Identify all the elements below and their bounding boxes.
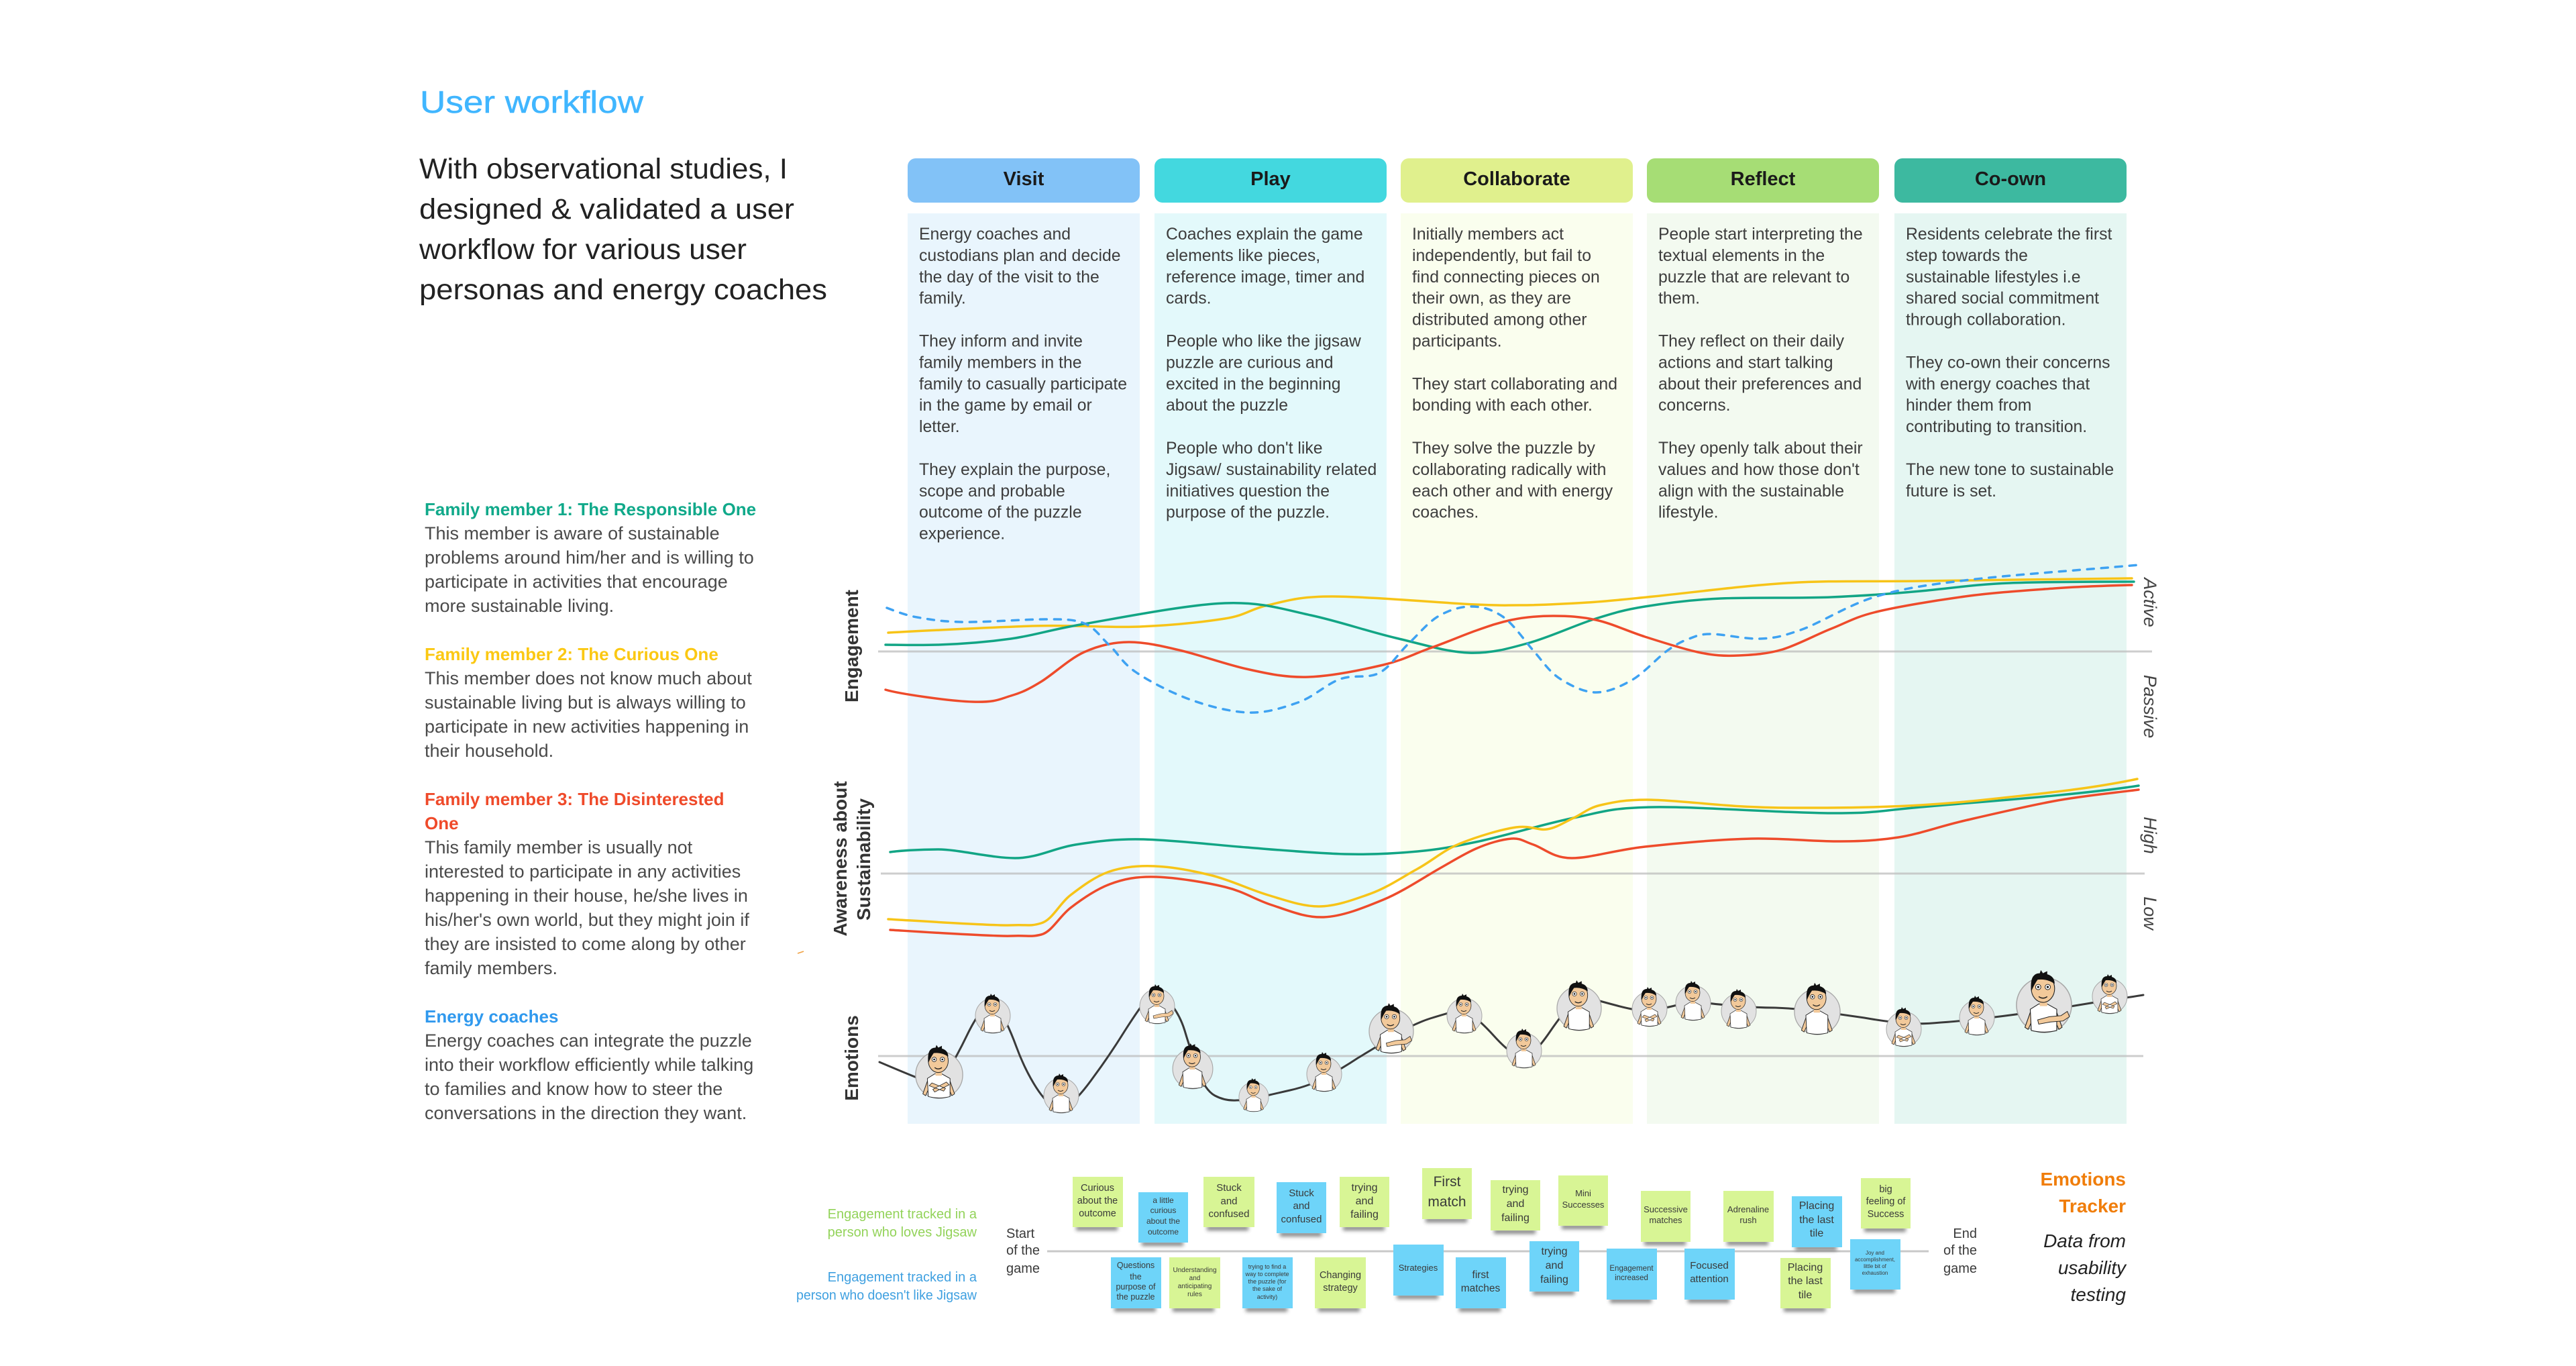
sticky: trying to find a way: activity): [1257, 1294, 1277, 1300]
emotion curve: [879, 993, 2143, 1108]
sticky: trying and failing blue: failing: [1540, 1274, 1568, 1285]
sticky: trying and failing upper: failing: [1501, 1212, 1529, 1224]
sticky: first matches: matches: [1461, 1283, 1501, 1294]
sticky: Changing strategy: strategy: [1323, 1283, 1358, 1294]
stage description: Co-own: The new tone to sustainable: [1906, 461, 2114, 479]
sticky: Joy and accomplishment: little bit of: [1864, 1263, 1887, 1269]
sticky: Questions the purpose of the puzzle: purpose of: [1116, 1282, 1156, 1292]
avatar: hopeful: [1447, 994, 1482, 1033]
sticky: Engagement increased: Engagement: [1609, 1265, 1654, 1273]
subtitle text block: With observational studies, I: [419, 153, 788, 185]
sticky: big feeling of Success: feeling of: [1866, 1196, 1906, 1207]
stage description: Co-own: with energy coaches that: [1905, 375, 2090, 393]
stage header: Collaborate: Collaborate: [1463, 168, 1570, 190]
sticky: trying and failing: [1340, 1177, 1389, 1230]
sticky: Stuck and confused blue: confused: [1281, 1214, 1322, 1225]
legend: doesn't like Jigsaw: [796, 1270, 977, 1303]
column: Reflect: [1647, 158, 1879, 1124]
sticky: Focused attention: [1684, 1249, 1735, 1303]
stage description: Collaborate: collaborating radically with: [1412, 461, 1606, 479]
stage description: Visit: They inform and invite: [919, 333, 1083, 350]
stage description: Play: People who like the jigsaw: [1166, 333, 1361, 350]
sticky: Adrenaline rush: rush: [1739, 1215, 1757, 1225]
emotions chart: [879, 970, 2143, 1113]
heading: Emotions Tracker: Emotions: [2040, 1169, 2126, 1190]
stage description: Visit: letter.: [919, 418, 960, 436]
avatar: laughing: [1557, 980, 1601, 1031]
sticky: trying and failing: trying: [1351, 1182, 1378, 1194]
sticky: Placing the last tile blue: tile: [1810, 1228, 1823, 1239]
sticky: Stuck and confused green: confused: [1209, 1208, 1249, 1220]
column background: Collaborate: [1401, 213, 1633, 1124]
stage description: Play: purpose of the puzzle.: [1166, 504, 1330, 522]
note: data from usability testing: usability: [2058, 1257, 2127, 1278]
persona: family member 2: Family member 2: The Curious One: [425, 644, 718, 664]
persona: family member 3: happening in their house, he/she lives in: [425, 886, 748, 906]
sticky: Stuck and confused blue: and: [1293, 1200, 1310, 1212]
avatar: yawning: [1173, 1043, 1213, 1089]
persona: family member 3: interested to participate in any activities: [425, 861, 741, 882]
awareness line chart: [888, 779, 2139, 936]
subtitle text block: personas and energy coaches: [419, 274, 827, 306]
stage header: Reflect: [1647, 158, 1879, 203]
heading: Emotions Tracker: [2040, 1169, 2126, 1216]
label: end of the game: End: [1953, 1226, 1977, 1241]
sticky: trying and failing: and: [1356, 1196, 1373, 1207]
sticky: Joy and accomplishment: [1850, 1239, 1900, 1293]
sticky: First match: First: [1434, 1174, 1461, 1190]
sticky: Curious about the outcome: outcome: [1079, 1208, 1116, 1219]
avatar: thinking: [1507, 1029, 1542, 1068]
sticky: Joy and accomplishment: Joy and: [1866, 1250, 1884, 1256]
persona: family member 3: they are insisted to come along by other: [425, 934, 746, 954]
sticky: Placing the last tile blue: [1792, 1196, 1842, 1251]
stage description: Collaborate: distributed among other: [1412, 311, 1587, 329]
column background: Reflect: [1647, 213, 1879, 1124]
sticky: Understanding and anticipating rules: rules: [1187, 1291, 1202, 1298]
sticky: Questions the purpose of the puzzle: [1111, 1257, 1161, 1312]
stage description: Play: puzzle are curious and: [1166, 354, 1334, 372]
stage description: Reflect: They openly talk about their: [1658, 439, 1863, 458]
persona list panel: [425, 499, 756, 1123]
avatar: content arms crossed: [1632, 987, 1667, 1027]
persona: family member 1: Family member 1: The Responsible One: [425, 499, 756, 519]
stage header: Collaborate: [1401, 158, 1633, 203]
sticky: a little curious about the outcome: curious: [1150, 1206, 1176, 1215]
sticky: First match: [1422, 1168, 1472, 1222]
stage description: Collaborate: independently, but fail to: [1412, 247, 1591, 265]
stage description: Reflect: actions and start talking: [1658, 354, 1833, 372]
sticky: Placing the last tile blue: the last: [1799, 1214, 1834, 1226]
avatar: concerned: [1044, 1073, 1079, 1113]
axis label: Emotions: Emotions: [841, 1015, 862, 1101]
sticky: big feeling of Success: Success: [1868, 1209, 1904, 1220]
sticky: Curious about the outcome: [1073, 1177, 1123, 1230]
persona: family member 3: Family member 3: The Disinterested: [425, 789, 724, 809]
heading: Emotions Tracker: Tracker: [2059, 1196, 2126, 1216]
scale label: Passive: Passive: [2140, 675, 2160, 738]
stage description: Reflect: about their preferences and: [1658, 375, 1862, 393]
stage description: Play: People who don't like: [1166, 439, 1323, 458]
column background: Visit: [908, 213, 1140, 1124]
label: start of the game: of the: [1006, 1243, 1040, 1258]
awareness curve: yellow: [888, 779, 2137, 925]
subtitle text block: workflow for various user: [419, 233, 747, 266]
stage description: Play: Coaches explain the game: [1166, 225, 1363, 244]
engagement curve: dashed blue: [887, 565, 2139, 713]
stage description: Collaborate: coaches.: [1412, 504, 1479, 522]
engagement curve: red: [885, 585, 2132, 702]
stage header: Co-own: Co-own: [1975, 168, 2046, 190]
avatar: explaining: [1140, 984, 1175, 1024]
stage description: Play: Jigsaw/ sustainability related: [1166, 461, 1377, 479]
persona: family member 2: their household.: [425, 741, 553, 761]
sticky: Joy and accomplishment: accomplishment,: [1855, 1257, 1895, 1263]
scale label: Active: Active: [2140, 576, 2160, 627]
sticky: Understanding and anticipating rules: Understanding: [1173, 1267, 1217, 1274]
stage description: Co-own: hinder them from: [1906, 397, 2031, 415]
avatar: smiling hands on hips: [1721, 989, 1756, 1029]
persona: family member 3: his/her's own world, but they might join if: [425, 910, 749, 930]
sticky: trying to find a way: [1242, 1257, 1293, 1312]
persona: family member 1: more sustainable living.: [425, 596, 614, 616]
sticky: Questions the purpose of the puzzle: the: [1130, 1272, 1142, 1281]
stage description: Play: elements like pieces,: [1166, 247, 1320, 265]
stage description: Co-own: They co-own their concerns: [1906, 354, 2110, 372]
sticky: Successive matches: matches: [1649, 1215, 1682, 1225]
label: end of the game: game: [1943, 1261, 1977, 1276]
column background: Play: [1155, 213, 1387, 1124]
persona: family member 3: One: [425, 813, 459, 833]
sticky: big feeling of Success: [1861, 1178, 1911, 1232]
stage description: Collaborate: each other and with energy: [1412, 482, 1613, 501]
axis label: Awareness about Sustainability: Sustainability: [853, 798, 874, 921]
avatar: talking: [1369, 1003, 1413, 1053]
stage description: Reflect: values and how those don't: [1658, 461, 1860, 479]
sticky: Placing the last tile blue: Placing: [1799, 1200, 1834, 1212]
stage header: Play: Play: [1250, 168, 1291, 190]
sticky: Changing strategy: Changing: [1320, 1270, 1361, 1281]
engagement line chart: [885, 565, 2139, 713]
stage description: Visit: the day of the visit to the: [919, 268, 1099, 286]
avatar: excited talking: [2017, 970, 2072, 1033]
sticky: Placing the last tile green: [1780, 1258, 1831, 1312]
stage description: Reflect: They reflect on their daily: [1658, 333, 1845, 350]
sticky: First match: match: [1428, 1194, 1466, 1210]
stage description: Play: initiatives question the: [1166, 482, 1330, 501]
sticky: Successive matches: Successive: [1644, 1204, 1688, 1214]
note: data from usability testing: [2043, 1230, 2127, 1305]
stage description: Reflect: align with the sustainable: [1658, 482, 1844, 501]
stage description: Co-own: through collaboration.: [1906, 311, 2066, 329]
stage description: Collaborate: They solve the puzzle by: [1412, 439, 1596, 458]
column: Play: [1155, 158, 1387, 1124]
avatar: arms crossed: [916, 1045, 963, 1098]
sticky: trying to find a way: way to complete: [1244, 1271, 1289, 1277]
axis label: Awareness about Sustainability: [830, 781, 874, 937]
stage description: Visit: They explain the purpose,: [919, 461, 1110, 479]
subtitle text block: [419, 153, 827, 306]
sticky: Adrenaline rush: Adrenaline: [1727, 1204, 1769, 1214]
stage description: Reflect: them.: [1658, 290, 1700, 308]
stage description: Visit: scope and probable: [919, 482, 1065, 501]
stage description: Visit: outcome of the puzzle: [919, 504, 1082, 522]
stage description: Visit: experience.: [919, 525, 1005, 543]
stage description: Visit: in the game by email or: [919, 397, 1092, 415]
sticky: first matches: first: [1472, 1269, 1489, 1281]
sticky: Placing the last tile green: Placing: [1788, 1262, 1823, 1273]
legend: doesn't like Jigsaw: person who doesn't like Jigsaw: [796, 1288, 977, 1303]
axis label: Awareness about Sustainability: Awareness about: [830, 781, 851, 937]
sticky: Stuck and confused blue: [1277, 1182, 1326, 1237]
sticky: Stuck and confused green: and: [1220, 1196, 1238, 1207]
stage description: Visit: family members in the: [919, 354, 1082, 372]
scale label: Low: Low: [2140, 896, 2160, 931]
persona: family member 1: This member is aware of sustainable: [425, 523, 720, 543]
stage description: Play: excited in the beginning: [1166, 375, 1341, 393]
sticky: Stuck and confused blue: Stuck: [1289, 1188, 1314, 1199]
sticky: Joy and accomplishment: exhaustion: [1862, 1270, 1888, 1276]
stage description: Co-own: future is set.: [1906, 482, 1996, 501]
persona: family member 2: [425, 644, 752, 761]
sticky: Strategies: Strategies: [1399, 1263, 1438, 1273]
sticky: Understanding and anticipating rules: anticipating: [1178, 1283, 1212, 1290]
stage description: Collaborate: their own, as they are: [1412, 290, 1571, 308]
persona: energy coaches: into their workflow efficiently while talking: [425, 1055, 753, 1075]
sticky: a little curious about the outcome: [1138, 1192, 1188, 1246]
stage description: Collaborate: Initially members act: [1412, 225, 1564, 244]
persona: family member 2: sustainable living but is always willing to: [425, 692, 746, 713]
avatar: sad: [1307, 1052, 1342, 1092]
stage header: Visit: [908, 158, 1140, 203]
sticky: Stuck and confused green: Stuck: [1216, 1182, 1242, 1194]
sticky: Questions the purpose of the puzzle: the puzzle: [1117, 1292, 1155, 1302]
sticky: Engagement increased: [1607, 1249, 1657, 1303]
persona: energy coaches: [425, 1006, 753, 1123]
stage description: Co-own: Residents celebrate the first: [1906, 225, 2112, 244]
sticky: Mini Successes: [1558, 1175, 1608, 1229]
avatar: curious: [975, 994, 1010, 1033]
sticky: Stuck and confused green: [1203, 1177, 1254, 1230]
stage description: Collaborate: find connecting pieces on: [1412, 268, 1600, 286]
legend: loves Jigsaw: Engagement tracked in a: [828, 1207, 977, 1222]
column background: Co-own: [1894, 213, 2127, 1124]
sticky: Focused attention: attention: [1690, 1273, 1729, 1285]
sticky: Adrenaline rush: [1723, 1191, 1774, 1245]
sticky: trying and failing blue: trying: [1541, 1246, 1568, 1257]
sticky: Curious about the outcome: Curious: [1081, 1183, 1114, 1194]
legend: loves Jigsaw: person who loves Jigsaw: [828, 1225, 977, 1240]
stage description: Collaborate: They start collaborating and: [1412, 375, 1617, 393]
legend: doesn't like Jigsaw: Engagement tracked in a: [828, 1270, 977, 1285]
stage description: Visit: Energy coaches and: [919, 225, 1071, 244]
sticky: a little curious about the outcome: a little: [1152, 1196, 1174, 1205]
sticky: trying and failing upper: [1491, 1180, 1540, 1234]
sticky: Curious about the outcome: about the: [1077, 1196, 1118, 1206]
sticky: trying and failing blue: [1529, 1241, 1579, 1295]
avatar: embarrassed: [1239, 1078, 1269, 1112]
stage description: Reflect: lifestyle.: [1658, 504, 1719, 522]
stage description: Collaborate: participants.: [1412, 333, 1502, 350]
sticky: trying and failing: failing: [1350, 1209, 1379, 1220]
stage description: Play: about the puzzle: [1166, 397, 1288, 415]
engagement curve: teal: [885, 582, 2134, 653]
stage description: Reflect: People start interpreting the: [1658, 225, 1863, 244]
sticky: Engagement increased: increased: [1615, 1274, 1648, 1282]
sticky: trying to find a way: the puzzle (for: [1248, 1278, 1287, 1285]
persona: energy coaches: Energy coaches: [425, 1006, 558, 1027]
label: end of the game: of the: [1943, 1243, 1977, 1258]
stage description: Play: reference image, timer and: [1166, 268, 1364, 286]
sticky: Mini Successes: Successes: [1562, 1200, 1605, 1210]
sticky: Changing strategy: [1315, 1257, 1366, 1312]
subtitle text block: designed & validated a user: [419, 193, 794, 225]
sticky: trying and failing blue: and: [1546, 1260, 1563, 1271]
sticky: trying and failing upper: and: [1507, 1198, 1524, 1210]
awareness curve: red: [890, 790, 2139, 936]
stage description: Co-own: step towards the: [1906, 247, 2028, 265]
sticky: Placing the last tile green: the last: [1788, 1275, 1823, 1287]
stage description: Co-own: shared social commitment: [1906, 290, 2099, 308]
stage description: Co-own: sustainable lifestyles i.e: [1906, 268, 2081, 286]
sticky: Placing the last tile green: tile: [1799, 1290, 1812, 1301]
sticky: trying to find a way: trying to find a: [1248, 1263, 1286, 1270]
sticky: trying and failing upper: trying: [1502, 1184, 1529, 1196]
persona: energy coaches: to families and know how to steer the: [425, 1079, 722, 1099]
title: User workflow: [420, 85, 644, 119]
persona: family member 1: problems around him/her and is willing to: [425, 547, 754, 568]
stage header: Play: [1155, 158, 1387, 203]
sticky: trying to find a way: the sake of: [1252, 1285, 1283, 1292]
stage description: Reflect: concerns.: [1658, 397, 1731, 415]
axis label: Engagement: Engagement: [841, 590, 862, 702]
column: Co-own: [1894, 158, 2127, 1124]
column: Collaborate: [1401, 158, 1633, 1124]
sticky: a little curious about the outcome: about the: [1146, 1216, 1180, 1226]
note: data from usability testing: Data from: [2043, 1230, 2126, 1251]
sticky: Understanding and anticipating rules: [1169, 1257, 1220, 1312]
legend: loves Jigsaw: [828, 1207, 977, 1240]
note: data from usability testing: testing: [2070, 1284, 2126, 1305]
stage description: Visit: family.: [919, 290, 966, 308]
avatar: happy: [1960, 996, 1994, 1035]
stage header: Co-own: [1894, 158, 2127, 203]
column: Visit: [908, 158, 1140, 1124]
sticky: first matches: [1456, 1257, 1506, 1312]
stage header: Reflect: Reflect: [1731, 168, 1796, 190]
persona: family member 2: This member does not know much about: [425, 668, 752, 688]
awareness curve: teal: [890, 786, 2139, 858]
sticky: big feeling of Success: big: [1879, 1184, 1892, 1195]
engagement curve: yellow: [888, 578, 2132, 633]
stage description: Visit: family to casually participate: [919, 375, 1127, 393]
sticky: a little curious about the outcome: outcome: [1148, 1227, 1179, 1237]
stage description: Visit: custodians plan and decide: [919, 247, 1121, 265]
stage description: Reflect: puzzle that are relevant to: [1658, 268, 1849, 286]
label: start of the game: Start: [1006, 1226, 1035, 1241]
persona: family member 1: participate in activities that encourage: [425, 572, 728, 592]
persona: family member 3: This family member is usually not: [425, 837, 693, 857]
sticky: Strategies: [1393, 1245, 1444, 1299]
stage header: Visit: Visit: [1004, 168, 1044, 190]
persona: family member 1: [425, 499, 756, 616]
avatar: pleased arms crossed: [1886, 1007, 1921, 1047]
stage description: Play: cards.: [1166, 290, 1212, 308]
avatar: confident: [1794, 983, 1840, 1035]
persona: family member 3: family members.: [425, 958, 557, 978]
persona: energy coaches: Energy coaches can integrate the puzzle: [425, 1031, 752, 1051]
scale label: High: High: [2140, 817, 2160, 854]
sticky notes board: [1073, 1168, 1911, 1312]
avatar: satisfied arms crossed: [2092, 974, 2127, 1014]
stage description: Co-own: contributing to transition.: [1906, 418, 2087, 436]
sticky: Successive matches: [1641, 1191, 1690, 1245]
persona: family member 2: participate in new activities happening in: [425, 717, 749, 737]
sticky: Questions the purpose of the puzzle: Questions: [1117, 1261, 1155, 1270]
stage description: Reflect: textual elements in the: [1658, 247, 1825, 265]
sticky: Focused attention: Focused: [1690, 1260, 1729, 1271]
avatar: smiling: [1676, 981, 1711, 1020]
sticky: Mini Successes: Mini: [1575, 1188, 1591, 1198]
stage description: Collaborate: bonding with each other.: [1412, 397, 1593, 415]
sticky: Understanding and anticipating rules: and: [1189, 1275, 1200, 1282]
label: start of the game: game: [1006, 1261, 1040, 1276]
persona: family member 3: [425, 789, 749, 978]
persona: energy coaches: conversations in the direction they want.: [425, 1103, 747, 1123]
